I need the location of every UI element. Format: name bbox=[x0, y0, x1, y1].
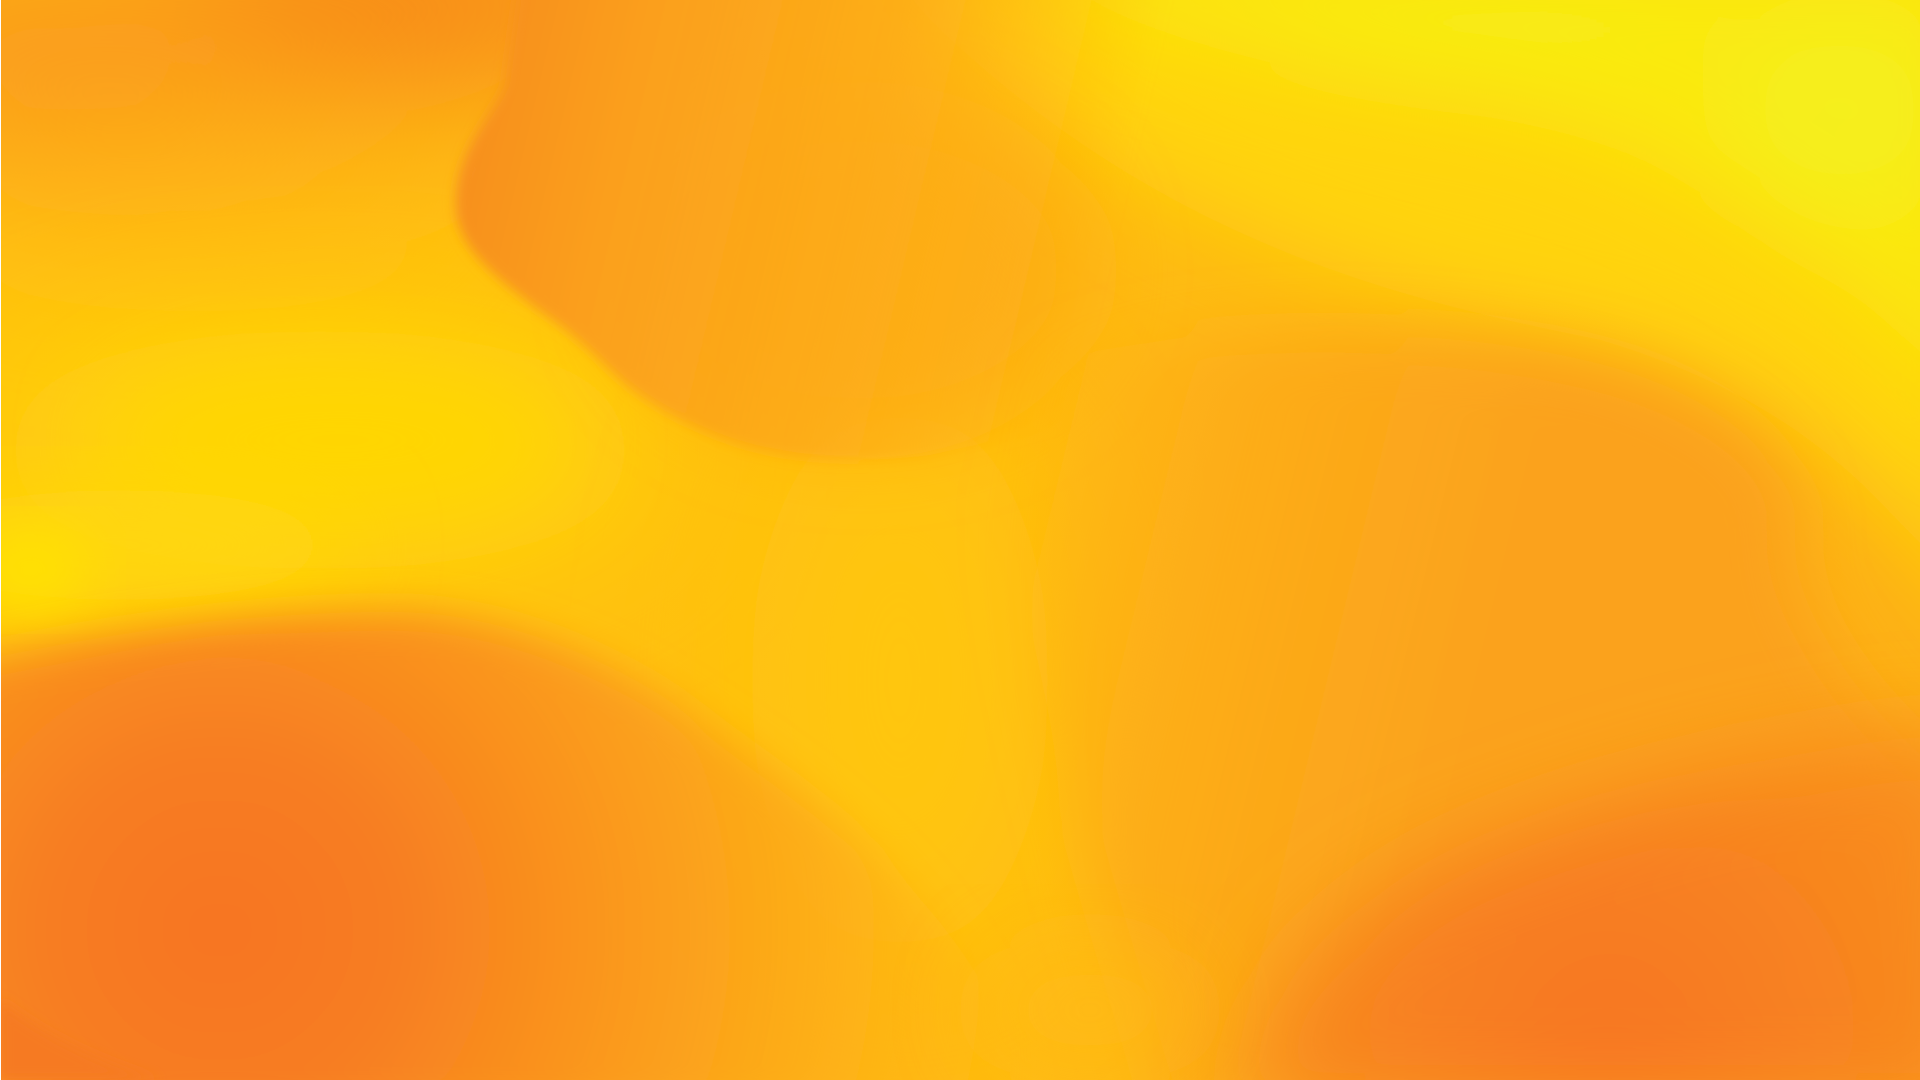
right orange blob bbox=[1000, 333, 1920, 1080]
top-right yellow glow bbox=[1040, 0, 1920, 440]
bottom-right orange corner bbox=[1250, 730, 1920, 1080]
central yellow glow bbox=[750, 400, 1050, 960]
bottom-left orange blob bbox=[0, 612, 1040, 1080]
top-right golden glow bbox=[900, 0, 1920, 660]
left yellow glow bbox=[0, 330, 660, 610]
upper orange blob with curved left edge bbox=[456, 0, 1180, 460]
central amber wash behind upper blob bbox=[630, 110, 1090, 430]
bottom-centre amber band bbox=[980, 940, 1200, 1080]
left edge hairline bbox=[0, 0, 1, 1080]
bottom-left deep corner bbox=[0, 1000, 160, 1080]
top-left orange glow bbox=[0, 0, 670, 260]
